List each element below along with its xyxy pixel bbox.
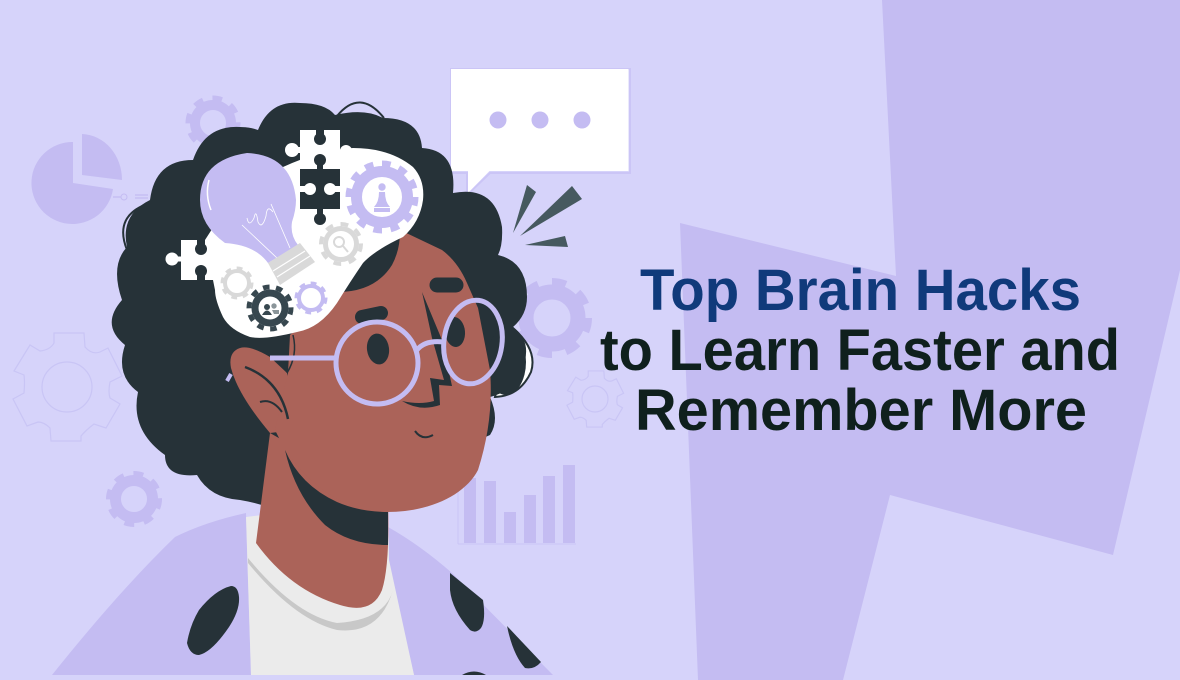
puzzle piece dark [299, 154, 341, 225]
ear [230, 347, 295, 433]
background icon: gear lower left [109, 474, 159, 524]
curl crescent right [495, 328, 533, 397]
jacket left [52, 513, 251, 675]
gear: chess pawn [349, 164, 415, 230]
jaw shadow [285, 450, 388, 545]
face [275, 230, 491, 512]
eyes [365, 316, 466, 366]
mouth [415, 431, 433, 437]
hair lobe right [486, 329, 526, 395]
t-shirt collar shadow [248, 558, 393, 630]
jacket spots [187, 573, 541, 675]
gear: small grey [222, 268, 252, 298]
glasses temple tip [227, 374, 231, 381]
ear details and hair strand [245, 335, 295, 419]
background bar chart [458, 465, 576, 544]
nose [402, 292, 452, 408]
neck [256, 433, 388, 608]
background shape [680, 0, 1180, 680]
eyebrows [362, 285, 456, 317]
puzzle piece white left [166, 239, 221, 281]
background icon: outline gear left [13, 333, 122, 441]
title: Remember More [635, 378, 1087, 443]
gear: small purple [296, 283, 326, 313]
title: to Learn Faster and [600, 318, 1120, 383]
background icon: gear right [516, 282, 588, 354]
light bulb [200, 153, 315, 285]
glasses [270, 296, 508, 404]
curl loops behind hair [123, 102, 384, 250]
title [600, 258, 1120, 443]
gear: magnifier [321, 224, 361, 264]
speech bubble [451, 69, 630, 195]
background icon: outline gear right [567, 371, 624, 427]
brain area [205, 148, 423, 338]
background icon: gear top [188, 98, 238, 148]
t-shirt [246, 500, 414, 675]
background icon: pie chart [31, 134, 148, 224]
emphasis dashes [513, 185, 582, 247]
hair cap under brain [338, 232, 400, 292]
jacket right [388, 527, 553, 675]
puzzle piece white top [285, 129, 352, 170]
gear: people [249, 287, 291, 329]
hair [112, 103, 527, 520]
title: Top Brain Hacks [640, 258, 1081, 323]
